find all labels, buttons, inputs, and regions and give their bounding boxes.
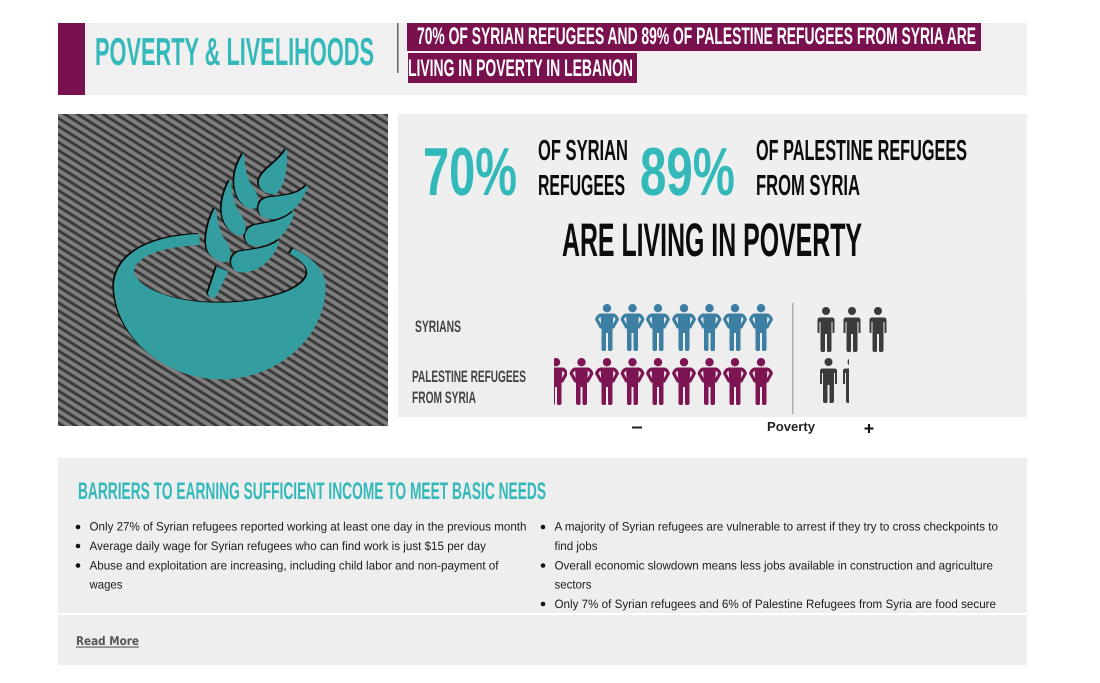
label: Palestine refugees: PALESTINE REFUGEES (412, 368, 526, 386)
label: Palestine refugees: FROM SYRIA (412, 389, 476, 407)
poverty scale legend (632, 419, 874, 434)
panel: barriers (58, 458, 1027, 613)
read more bar (58, 615, 1027, 665)
heading: BARRIERS TO EARNING SUFFICIENT INCOME TO MEET BASIC NEEDS (78, 478, 546, 505)
stat: 70 percent (423, 134, 628, 210)
right bullet list: sectors (554, 578, 592, 592)
left bullet list: Abuse and exploitation are increasing, including child labor and non-payment of (90, 558, 499, 572)
stat: 89 percent: FROM SYRIA (756, 170, 860, 202)
stat: 70 percent: 70% (423, 134, 517, 210)
left bullet list: Average daily wage for Syrian refugees who can find work is just $15 per day (90, 539, 487, 553)
panel: statistics (398, 114, 1027, 289)
poverty scale legend: Poverty (767, 419, 816, 434)
left bullet list: Only 27% of Syrian refugees reported working at least one day in the previous month (90, 520, 526, 534)
pictogram chart (398, 289, 1027, 417)
right bullet list: Overall economic slowdown means less jobs available in construction and agriculture (554, 558, 993, 572)
stat: 70 percent: REFUGEES (538, 170, 625, 202)
right bullet list: find jobs (554, 539, 598, 553)
right bullet list (541, 520, 998, 611)
highlighted headline: LIVING IN POVERTY IN LEBANON (408, 55, 633, 82)
label: Palestine refugees (412, 368, 526, 407)
stat: 70 percent: OF SYRIAN (538, 135, 628, 167)
header banner (58, 23, 1027, 95)
label: Syrians: SYRIANS (415, 318, 461, 336)
title: POVERTY & LIVELIHOODS (95, 31, 374, 74)
icon: bowl and wheat (112, 150, 326, 379)
panel: striped image with bowl and wheat icon (58, 114, 388, 426)
purple accent bar (58, 23, 85, 95)
blue figures row (597, 304, 771, 351)
link: read more: Read More (76, 634, 139, 648)
left bullet list (76, 520, 526, 592)
stat: 89 percent: 89% (640, 134, 735, 210)
purple figures row (546, 358, 771, 405)
right bullet list: Only 7% of Syrian refugees and 6% of Palestine Refugees from Syria are food secure (554, 597, 996, 611)
right bullet list: A majority of Syrian refugees are vulnerable to arrest if they try to cross checkpoints to (554, 520, 998, 534)
left bullet list: wages (89, 578, 122, 592)
highlighted headline (407, 23, 981, 83)
dark figures rows (818, 307, 886, 403)
stat: 89 percent (640, 134, 967, 210)
